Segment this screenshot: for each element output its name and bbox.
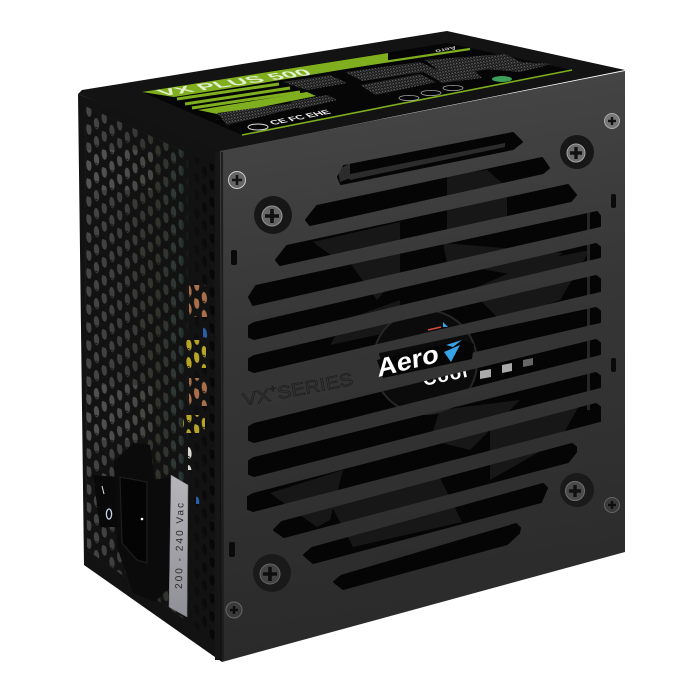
corner screw: lower left — [226, 602, 242, 618]
green stripes — [177, 84, 300, 108]
screw: top right — [560, 135, 594, 169]
strut reflections — [338, 143, 590, 572]
hub sticker red dash — [428, 327, 441, 330]
large screws in recesses — [253, 135, 594, 592]
certification marks — [248, 76, 512, 130]
logo: Aero: Aero — [376, 340, 440, 383]
fan blades — [270, 170, 590, 547]
front panel — [220, 71, 625, 662]
interior seen through the perforation — [85, 106, 216, 642]
corner screw: upper right — [604, 114, 620, 128]
series name embossed: VX+ SERIES: SERIES — [276, 369, 355, 403]
circuit chips — [480, 358, 533, 379]
seam to the front panel — [215, 152, 220, 660]
rocker switch — [93, 475, 117, 527]
screw: upper left — [254, 196, 292, 234]
voltage sticker — [169, 475, 188, 617]
series name embossed: VX+ SERIES: VX — [241, 386, 268, 410]
fan seen through the grille slots — [247, 132, 601, 590]
screw: lower right — [560, 473, 594, 507]
small corner screws — [226, 114, 620, 618]
thin green rule — [317, 49, 470, 72]
series name embossed: VX+ SERIES: + — [268, 383, 278, 396]
specification text blocks — [217, 54, 552, 125]
bottom green rule — [242, 70, 572, 135]
product name: VX PLUS 500 — [153, 67, 316, 98]
inlet socket — [120, 477, 147, 563]
corner screw: upper left — [228, 172, 246, 188]
corner screw: lower right — [604, 498, 620, 512]
green title band — [142, 53, 388, 97]
hub sticker blue mark — [443, 322, 448, 327]
series name embossed: VX+ SERIES — [241, 368, 355, 410]
logo blue triangles — [444, 340, 462, 362]
small mounting slots — [229, 194, 616, 557]
socket pin — [141, 518, 143, 520]
small brand mark: Aero — [433, 45, 458, 54]
hub sticker lower text: Cool — [421, 361, 470, 391]
certification marks: CE FC EHE — [268, 109, 334, 127]
voltage sticker: 200 - 240 Vac — [174, 503, 187, 589]
top panel with product label — [78, 31, 625, 151]
perforated sheet — [85, 106, 216, 642]
power inlet plate — [114, 443, 170, 602]
fan hub — [373, 310, 477, 414]
green info block — [198, 92, 316, 115]
logo: Aero — [376, 340, 474, 383]
side panel: perforated vent with power socket — [78, 94, 222, 662]
illustration: power supply unit — [78, 31, 625, 662]
screw: lower left — [253, 554, 291, 592]
